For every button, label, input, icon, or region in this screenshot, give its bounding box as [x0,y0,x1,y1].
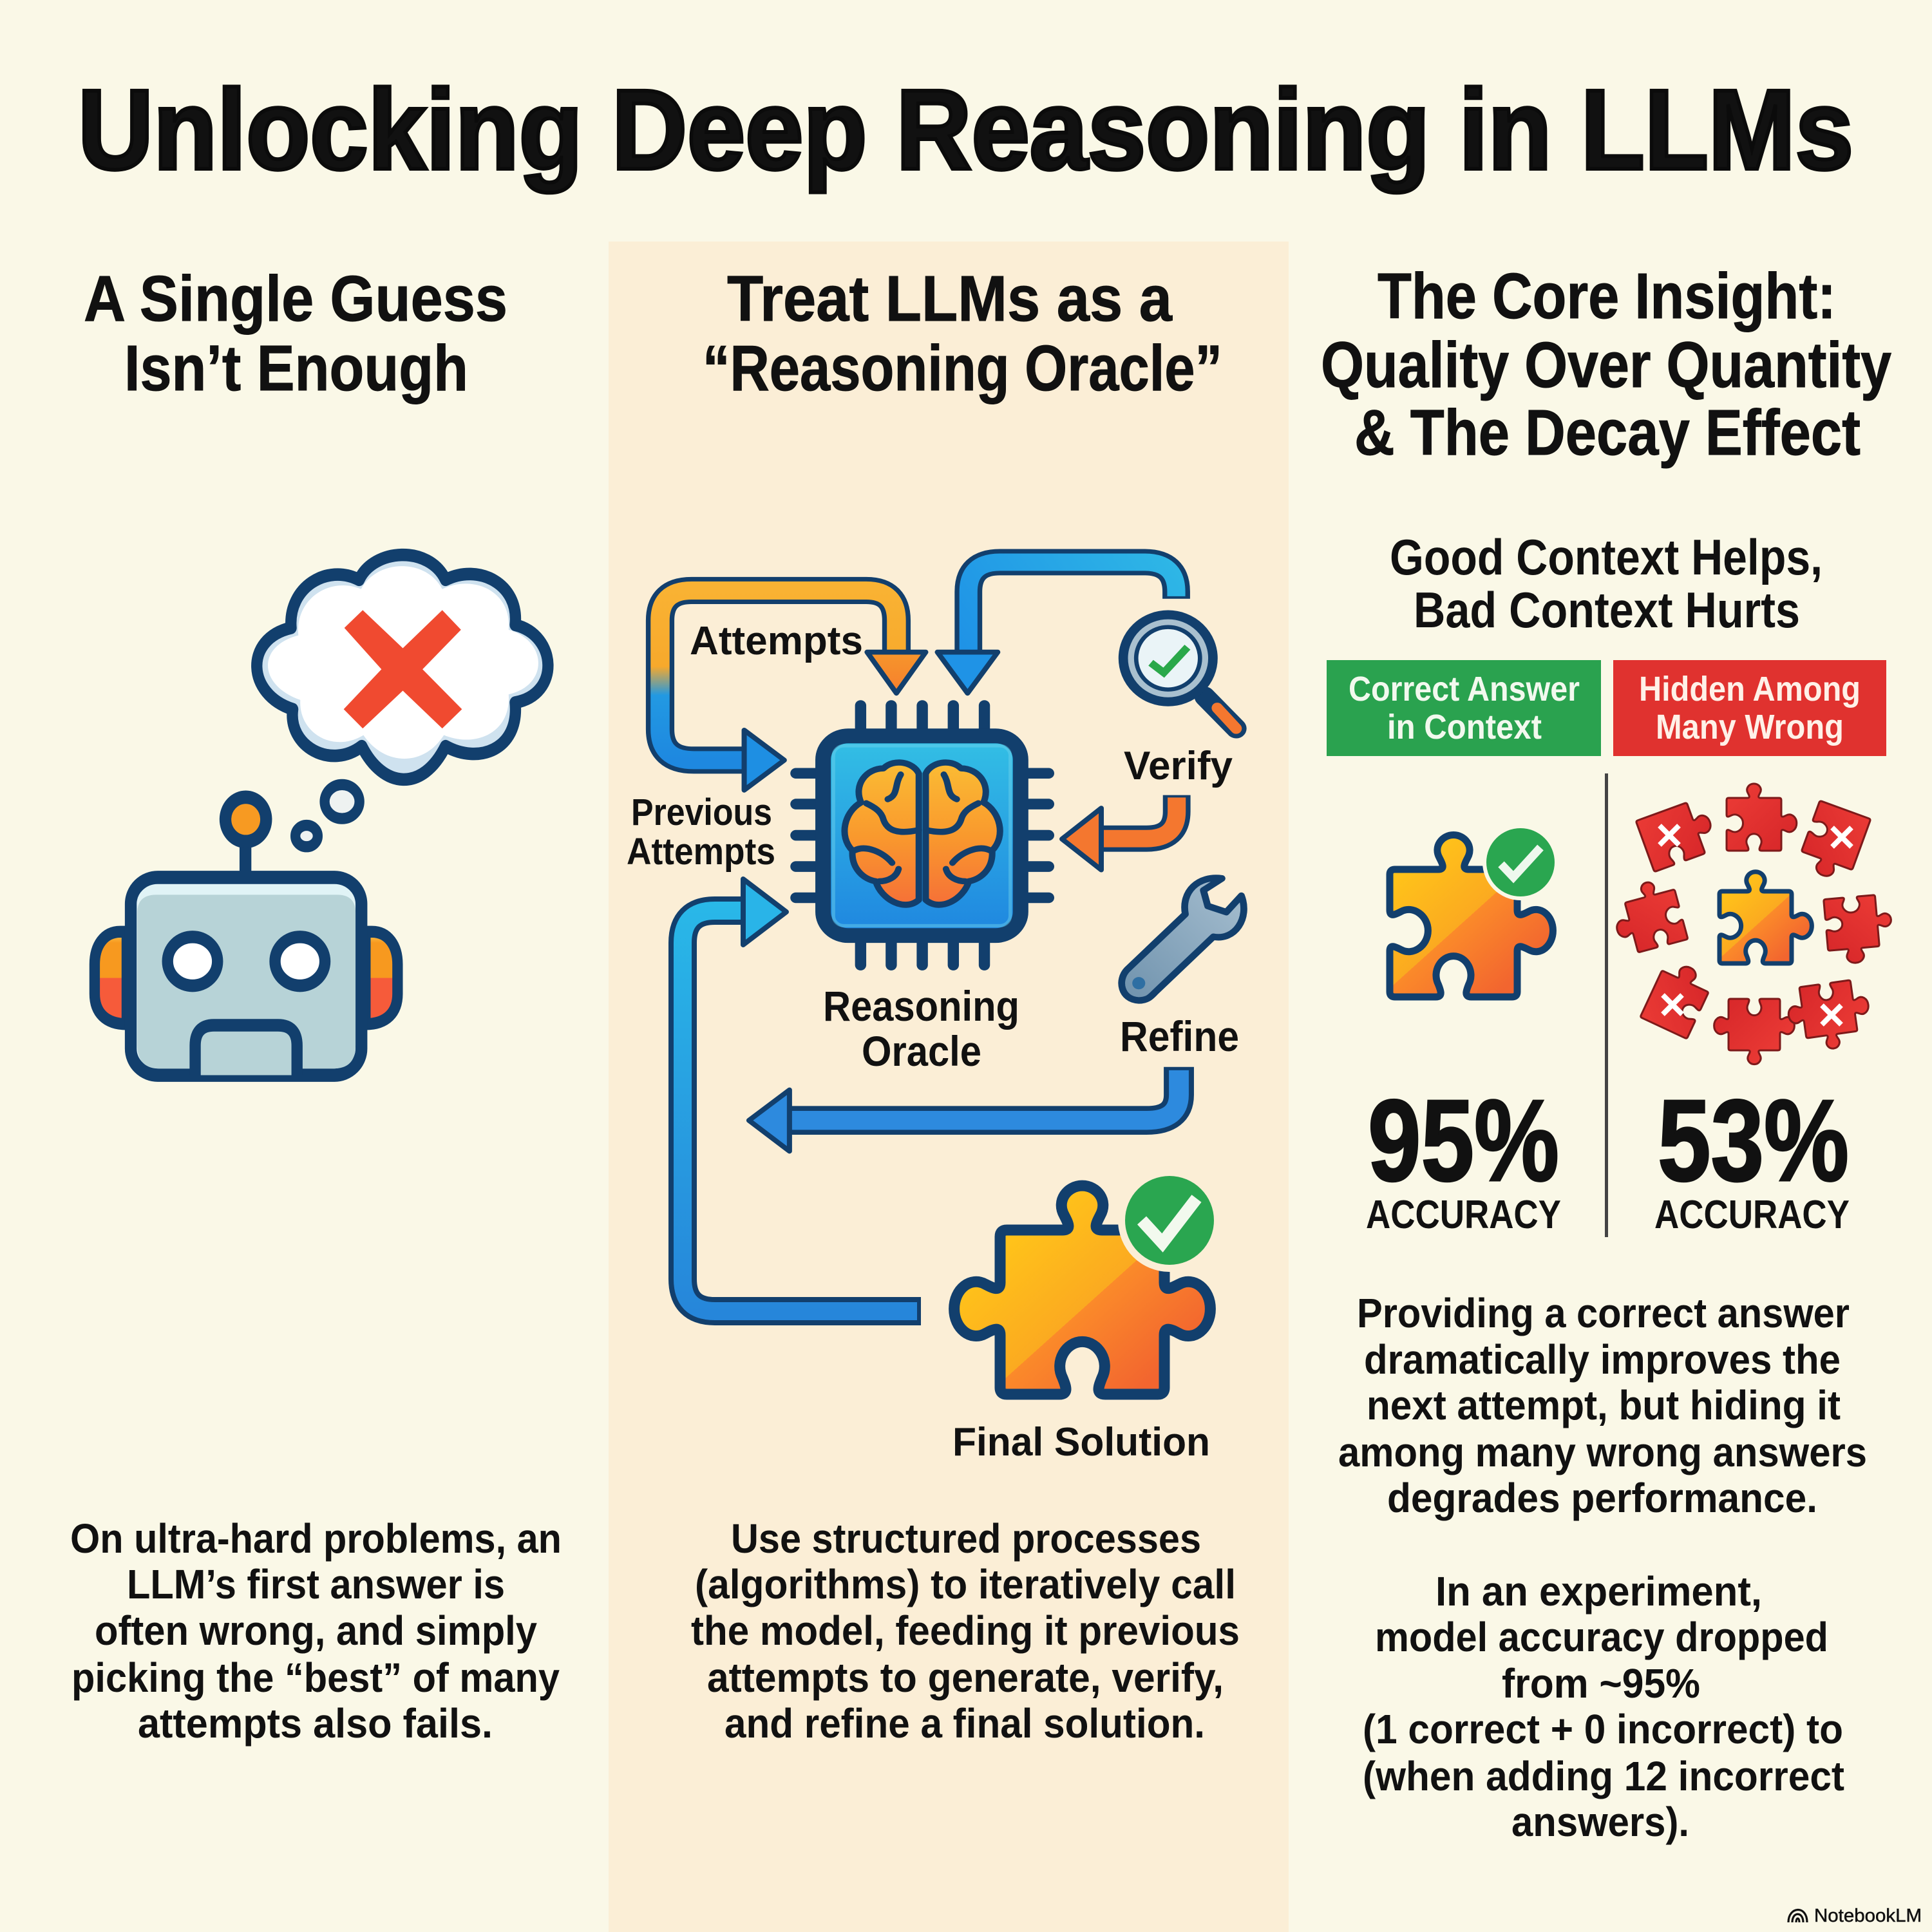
subheading: good context [1390,529,1823,638]
label: correct answer [1327,660,1601,756]
text: right column experiment: from ~95% [1502,1660,1700,1707]
stat: 53 percent: 53% [1658,1076,1849,1206]
text: right column experiment: (1 correct + 0 incorrect) to [1363,1706,1843,1752]
stat: 95 percent: 95% [1368,1076,1559,1206]
label: reasoning oracle: Oracle [862,1027,981,1075]
heading: reasoning oracle: “Reasoning Oracle” [703,332,1222,404]
heading: core insight: & The Decay Effect [1354,397,1861,469]
antenna [225,797,266,876]
correct piece among wrong [1719,872,1812,963]
icon: correct puzzle [1390,824,1558,997]
heading: reasoning oracle: Treat LLMs as a [727,263,1173,335]
text: left column body: picking the “best” of many [71,1654,560,1701]
notebooklm logo: NotebookLM [1814,1906,1922,1926]
label: hidden among: Hidden Among [1639,670,1861,708]
icon: magnifier [1123,615,1236,728]
text: center column body: (algorithms) to iteratively call [695,1561,1236,1607]
thought cloud [257,555,548,779]
text: right column explanation: next attempt, but hiding it [1367,1382,1841,1428]
text: center column body: the model, feeding it previous [691,1607,1240,1654]
eyes [167,937,325,986]
wrench hole [1132,977,1145,989]
diagram: reasoning oracle loop [627,562,1244,1464]
text: center column body: and refine a final solution. [724,1700,1205,1747]
text: right column experiment: (when adding 12 incorrect [1363,1753,1844,1799]
icon: final solution puzzle [954,1169,1221,1394]
x marks [1660,826,1852,1025]
thought bubbles [296,784,359,847]
label: previous attempts: Previous [631,791,772,833]
icon: brain [844,762,1000,905]
arrow: verify to oracle top [938,562,1177,693]
text: right column experiment [1363,1568,1844,1845]
heading: a single guess: A Single Guess [84,263,507,335]
icon: chip [796,706,1048,965]
text: right column explanation [1338,1290,1867,1521]
text: right column experiment: In an experiment, [1435,1568,1762,1615]
stat: 53 percent: ACCURACY [1654,1193,1850,1237]
icon: scattered wrong puzzles [1607,784,1895,1065]
label: refine: Refine [1120,1012,1239,1060]
subheading: good context: Good Context Helps, [1390,529,1823,585]
arrow: verify orange [1062,795,1177,870]
icon: robot with thought cloud [95,555,548,1075]
label: hidden among: Many Wrong [1656,708,1844,746]
text: left column body [70,1515,562,1747]
heading: core insight [1321,260,1891,469]
stat: 95 percent [1366,1076,1561,1237]
text: right column explanation: Providing a correct answer [1357,1290,1850,1336]
arrow: refine [749,1067,1179,1151]
label: reasoning oracle: Reasoning [823,982,1019,1030]
mouth [195,1025,297,1075]
label: correct answer: Correct Answer [1349,670,1580,708]
text: right column experiment: model accuracy dropped [1375,1614,1828,1660]
stat: 53 percent [1654,1076,1850,1237]
text: right column explanation: degrades performance. [1387,1475,1817,1521]
text: right column explanation: among many wrong answers [1338,1429,1867,1475]
panel: center column [609,242,1289,1932]
text: left column body: often wrong, and simply [95,1607,537,1654]
label: hidden among [1613,660,1886,756]
label: reasoning oracle [823,982,1019,1075]
text: left column body: LLM’s first answer is [127,1561,505,1607]
heading: reasoning oracle [703,263,1222,404]
text: center column body: attempts to generate, verify, [707,1654,1224,1701]
label: previous attempts: Attempts [627,831,775,873]
text: right column experiment: answers). [1511,1799,1689,1845]
text: left column body: attempts also fails. [138,1700,493,1747]
arrow: refine loop back to oracle [683,879,921,1311]
text: center column body: Use structured processes [731,1515,1201,1562]
label: final solution: Final Solution [952,1420,1210,1464]
subheading: good context: Bad Context Hurts [1414,582,1800,638]
text: center column body [691,1515,1240,1747]
text: right column explanation: dramatically improves the [1364,1336,1841,1383]
label: previous attempts [627,791,775,873]
label: correct answer: in Context [1387,708,1542,746]
icon: wrench [1122,878,1244,1000]
label: attempts: Attempts [690,619,863,663]
heading: a single guess: Isn’t Enough [124,332,468,404]
heading: core insight: The Core Insight: [1378,260,1836,332]
stat: 95 percent: ACCURACY [1366,1193,1561,1237]
text: left column body: On ultra-hard problems, an [70,1515,562,1562]
ears [95,932,397,1024]
heading: a single guess [84,263,507,404]
red x [344,610,462,728]
label: verify: Verify [1124,744,1233,788]
robot head [131,877,361,1075]
arrow: attempts [660,591,925,790]
